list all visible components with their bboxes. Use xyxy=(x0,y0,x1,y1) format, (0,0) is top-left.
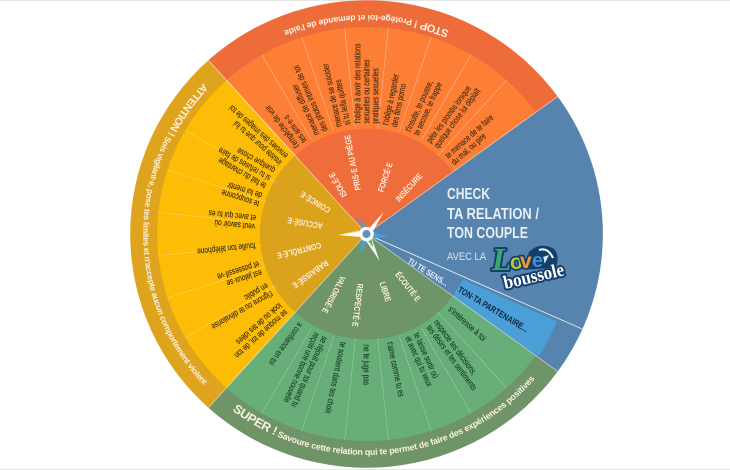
inner feeling labels: RESPECTÉ·E xyxy=(350,283,365,327)
orange statements: menace de se suicider xyxy=(320,62,344,128)
heading: super band: SUPER ! Savoure cette relation qui te permet de faire des expériences positives xyxy=(234,376,534,457)
panel: orange stop section xyxy=(208,0,558,234)
yellow statements: t'ignore ou te dévalorise xyxy=(210,289,275,332)
orange statements: pratiques sexuelles xyxy=(371,68,381,124)
panel title: check ta relation: TA RELATION / xyxy=(447,206,540,223)
orange statements: tes ami·e·s xyxy=(281,113,309,145)
yellow statements: insiste pour que tu lui xyxy=(231,119,284,167)
orange statements xyxy=(263,43,502,167)
icon: love boussole logo: v xyxy=(520,250,532,273)
text: avec la: AVEC LA xyxy=(447,251,487,263)
orange statements: des films porno xyxy=(389,83,408,128)
green statements xyxy=(266,304,488,415)
orange statements: si tu le/la quittes xyxy=(333,78,353,126)
orange statements: des photos intimes de toi xyxy=(291,64,330,133)
icon: love boussole logo xyxy=(491,241,566,293)
orange statements: t'oblige à regarder xyxy=(380,73,401,126)
orange statements: t'oblige à avoir des relations xyxy=(352,43,363,124)
yellow statements: est jaloux·se xyxy=(225,268,263,288)
green statements: se réjouit pour toi quand tu xyxy=(289,335,330,409)
yellow statements: quelque chose xyxy=(235,145,277,175)
inner feeling labels: CONTRÔLÉ·E xyxy=(276,240,322,261)
yellow statements: de lui mentir xyxy=(226,180,263,200)
yellow statements: envoies des images de toi xyxy=(227,103,290,161)
panel title: check ta relation: TON COUPLE xyxy=(447,225,528,242)
green statements: te soutient dans tes choix xyxy=(323,341,348,415)
yellow statements: en public xyxy=(242,281,270,303)
green statements: tes désirs et tes sentiments xyxy=(424,323,479,392)
heading: stop band: STOP ! Protège-toi et demande de l'aide xyxy=(284,14,448,37)
green statements: s'intéresse à toi xyxy=(446,304,488,343)
panel: blue check section xyxy=(366,97,603,371)
icon: love boussole logo: boussole xyxy=(501,259,566,293)
green statements: ne te juge pas xyxy=(361,344,372,385)
panel title: check ta relation xyxy=(447,186,540,242)
icon: compass star xyxy=(338,212,389,261)
yellow statements: te fait du chantage xyxy=(216,155,268,191)
inner feeling labels: VALORISÉ·E xyxy=(320,274,348,315)
green statements: et avec qui tu veux xyxy=(403,335,435,388)
orange statements: du mal, ou pire xyxy=(449,131,488,167)
panel: green super section xyxy=(208,234,558,468)
inner feeling labels: ACCUSÉ·E xyxy=(287,215,324,231)
orange statements: te secoue, te frappe xyxy=(411,81,444,137)
yellow statements: se moque de toi, de ton xyxy=(232,307,290,360)
icon: love boussole logo: o xyxy=(510,251,523,274)
yellow statements: fouille ton téléphone xyxy=(197,241,256,257)
panel title: check ta relation: CHECK xyxy=(447,186,491,203)
yellow statements: et possessif·ve xyxy=(216,259,261,282)
orange statements: quelque chose lui déplaît xyxy=(432,86,483,150)
inner feeling labels: RABAISSÉ·E xyxy=(290,258,330,290)
heading: attention band: ATTENTION ! Sois vigilant·e, pose tes limites et n'accepte aucun comportement violent xyxy=(143,84,207,385)
inner feeling labels: LIBRE xyxy=(377,281,393,303)
inner feeling labels: FORCÉ·E xyxy=(376,161,395,193)
orange statements: sexuelles ou certaines xyxy=(362,59,372,124)
inner feeling labels: ÉCOUTÉ·E xyxy=(393,270,423,303)
green statements: reçois une bonne nouvelle xyxy=(281,331,322,404)
orange statements: t'insulte, te pousse, xyxy=(403,79,435,133)
orange statements: menace de diffuser xyxy=(289,82,322,137)
label: ton ta partenaire: TON·TA PARTENAIRE... xyxy=(456,285,530,334)
icon: love boussole logo: e xyxy=(532,250,543,272)
panel: yellow attention section xyxy=(130,60,366,408)
yellow statements xyxy=(197,103,290,360)
green statements: t'aime comme tu es xyxy=(385,341,407,398)
orange statements: pète les plombs lorsque xyxy=(424,84,473,145)
inner feeling labels xyxy=(276,134,425,327)
compass wheel xyxy=(130,0,603,468)
orange statements: te menace de te faire xyxy=(443,112,496,161)
yellow statements: et avec qui tu es xyxy=(208,208,256,223)
inner feeling labels: ISOLÉ·E xyxy=(327,171,349,199)
yellow statements: veut savoir où xyxy=(214,218,256,232)
green statements: te laisse sortir où xyxy=(411,331,441,380)
label: tu te sens: TU TE SENS... xyxy=(406,256,450,288)
inner feeling labels: INSÉCURE xyxy=(394,171,425,204)
inner feeling labels: PRIS·E AU PIÈGE xyxy=(342,134,363,191)
inner feeling labels: COINCÉ·E xyxy=(299,189,332,215)
green statements: a confiance en toi xyxy=(266,320,305,368)
icon: love boussole logo: L xyxy=(491,241,512,277)
yellow statements: si tu refuses de faire xyxy=(216,145,272,183)
yellow statements: look ou de tes idées xyxy=(234,301,284,347)
orange statements: t'empêche de voir xyxy=(263,103,301,150)
yellow statements: te soupçonne xyxy=(220,187,260,209)
green statements: respecte tes décisions, xyxy=(432,318,479,377)
